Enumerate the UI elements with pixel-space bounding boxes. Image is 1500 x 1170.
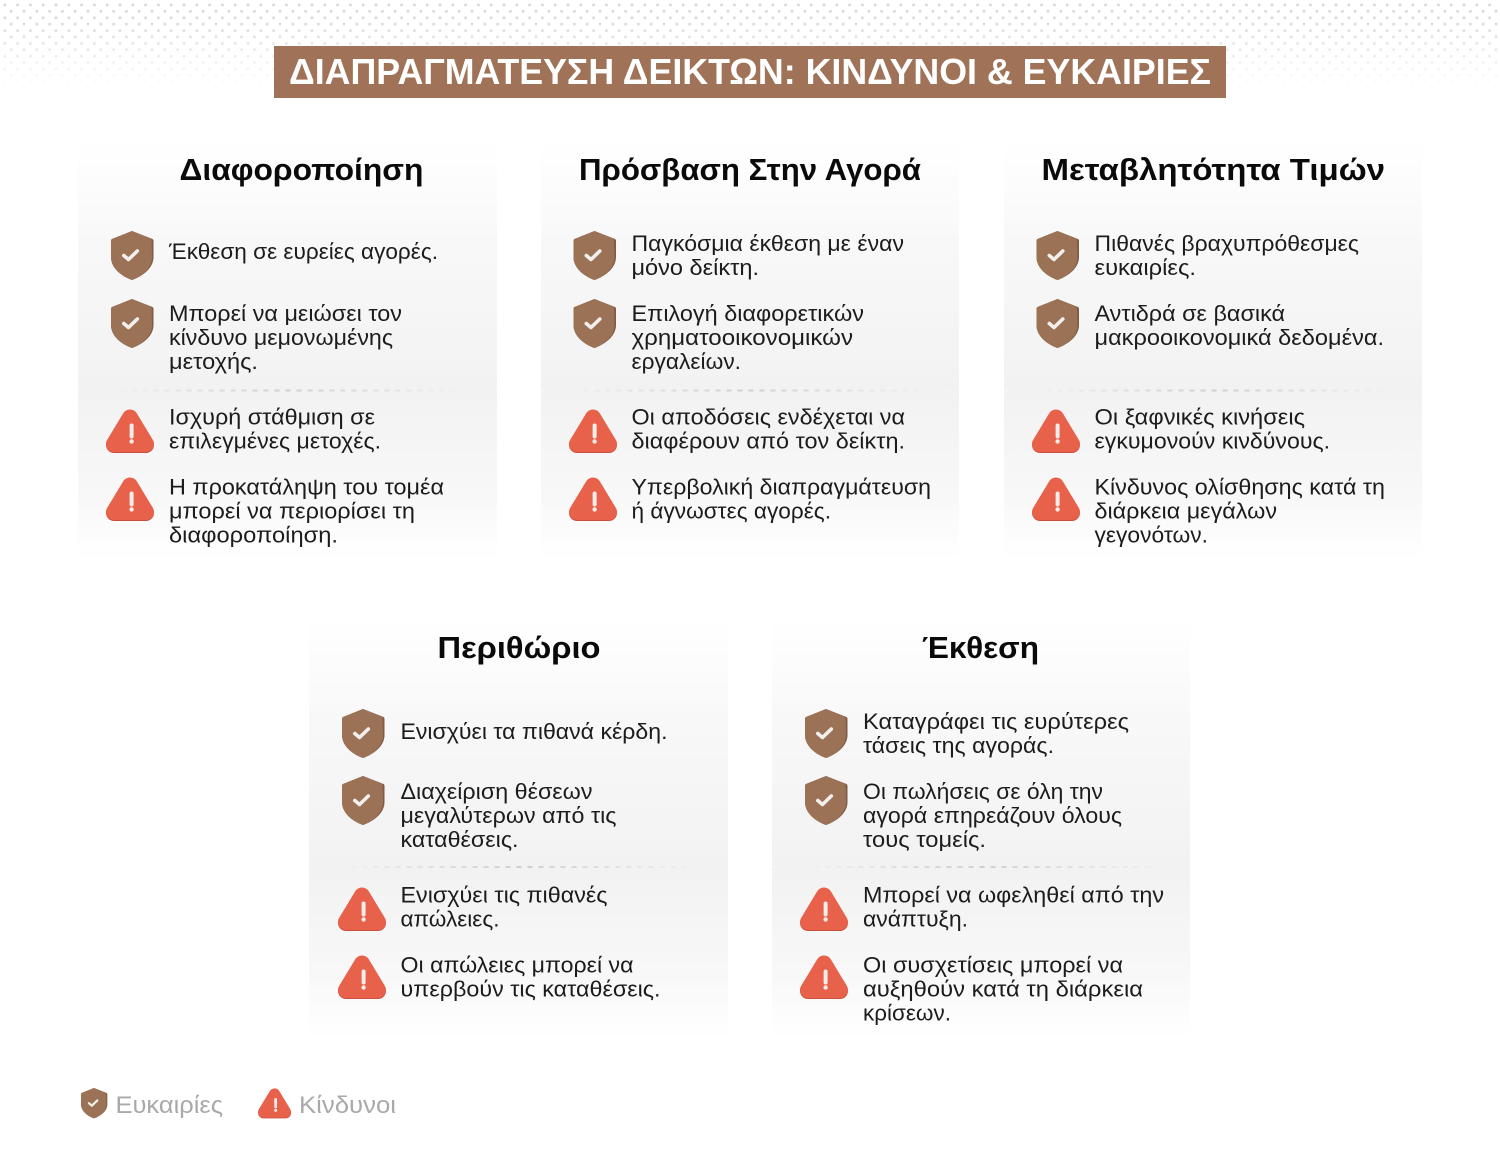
opportunity item: Πιθανές βραχυπρόθεσμες [1094, 231, 1359, 256]
risk item [114, 404, 381, 454]
opportunity item: ευκαιρίες. [1094, 255, 1196, 280]
legend: risks [264, 1092, 396, 1119]
risk item: ανάπτυξη. [863, 906, 968, 932]
opportunity item [805, 709, 1129, 758]
opportunity item: Καταγράφει τις ευρύτερες [863, 709, 1129, 734]
opportunity item: καταθέσεις. [400, 827, 518, 852]
opportunity item [342, 709, 668, 758]
legend: opportunities [81, 1088, 223, 1119]
risk item: γεγονότων. [1094, 522, 1208, 548]
opportunity item: μόνο δείκτη. [632, 255, 759, 280]
risk item: Οι συσχετίσεις μπορεί να [863, 952, 1123, 978]
opportunity item: Έκθεση σε ευρείες αγορές. [168, 239, 438, 264]
risk item: υπερβούν τις καταθέσεις. [400, 976, 660, 1002]
opportunity item: τάσεις της αγοράς. [863, 733, 1054, 758]
opportunity item: Παγκόσμια έκθεση με έναν [632, 231, 904, 256]
risk item [1040, 474, 1385, 548]
risk item [808, 952, 1143, 1026]
opportunity item: μεγαλύτερων από τις [400, 803, 617, 828]
background dot pattern [4, 4, 1498, 70]
opportunity item [1036, 231, 1359, 280]
risk item: Ενισχύει τις πιθανές [400, 882, 608, 908]
legend: opportunities: Ευκαιρίες [116, 1092, 223, 1119]
title: ΔΙΑΠΡΑΓΜΑΤΕΥΣΗ ΔΕΙΚΤΩΝ: ΚΙΝΔΥΝΟΙ & ΕΥΚΑΙΡΙΕΣ [289, 51, 1211, 92]
panel: Έκθεση [772, 618, 1190, 1038]
panel: Διαφοροποίηση [78, 140, 497, 560]
opportunity item: χρηματοοικονομικών [632, 325, 853, 350]
risk item: αυξηθούν κατά τη διάρκεια [863, 976, 1143, 1002]
risk item: ή άγνωστες αγορές. [632, 498, 831, 524]
opportunity item: εργαλείων. [632, 349, 741, 374]
risk item: Μπορεί να ωφεληθεί από την [863, 882, 1164, 908]
opportunity item: Μπορεί να μειώσει τον [169, 301, 402, 326]
panel: Περιθώριο [309, 618, 728, 1038]
heading: Περιθώριο [438, 630, 600, 665]
risk item: Οι ξαφνικές κινήσεις [1094, 404, 1305, 430]
opportunity item: Ενισχύει τα πιθανά κέρδη. [400, 719, 668, 744]
legend [81, 1088, 396, 1119]
heading: Πρόσβαση Στην Αγορά [579, 152, 921, 187]
risk item: Ισχυρή στάθμιση σε [169, 404, 375, 430]
heading: Μεταβλητότητα Τιμών [1042, 152, 1385, 187]
risk item: απώλειες. [400, 906, 500, 932]
opportunity item: Επιλογή διαφορετικών [632, 301, 864, 326]
risk item [1040, 404, 1330, 454]
legend: risks: Κίνδυνοι [299, 1092, 396, 1119]
panel: Πρόσβαση Στην Αγορά [541, 140, 959, 560]
opportunity item: Αντιδρά σε βασικά [1094, 301, 1285, 326]
opportunity item: κίνδυνο μεμονωμένης [169, 325, 393, 350]
risk item [346, 882, 608, 932]
opportunity item: τους τομείς. [863, 827, 986, 852]
risk item: μπορεί να περιορίσει τη [169, 498, 415, 524]
opportunity item [342, 776, 617, 852]
risk item [808, 882, 1164, 932]
risk item [346, 952, 660, 1002]
risk item [577, 404, 905, 454]
opportunity item [111, 299, 402, 374]
risk item: διαφοροποίηση. [169, 522, 338, 548]
opportunity item: Οι πωλήσεις σε όλη την [863, 779, 1103, 804]
risk item: επιλεγμένες μετοχές. [169, 428, 381, 454]
risk item: εγκυμονούν κινδύνους. [1094, 428, 1330, 454]
opportunity item: μακροοικονομικά δεδομένα. [1094, 325, 1384, 350]
risk item: διαφέρουν από τον δείκτη. [632, 428, 905, 454]
panel: Μεταβλητότητα Τιμών [1004, 140, 1422, 560]
risk item: Κίνδυνος ολίσθησης κατά τη [1094, 474, 1385, 500]
risk item: Υπερβολική διαπραγμάτευση [632, 474, 931, 500]
risk item: διάρκεια μεγάλων [1094, 498, 1277, 524]
heading: Διαφοροποίηση [180, 152, 424, 187]
opportunity item [1036, 299, 1384, 350]
opportunity item [574, 299, 864, 374]
opportunity item [574, 231, 904, 280]
risk item [114, 474, 444, 548]
risk item: Η προκατάληψη του τομέα [169, 474, 444, 500]
opportunity item [805, 776, 1122, 852]
risk item: κρίσεων. [863, 1000, 951, 1026]
risk item [577, 474, 931, 524]
opportunity item: αγορά επηρεάζουν όλους [863, 803, 1122, 828]
risk item: Οι απώλειες μπορεί να [400, 952, 634, 978]
opportunity item [111, 231, 438, 280]
risk item: Οι αποδόσεις ενδέχεται να [632, 404, 905, 430]
opportunity item: μετοχής. [169, 349, 258, 374]
heading: Έκθεση [922, 630, 1039, 665]
opportunity item: Διαχείριση θέσεων [400, 779, 592, 804]
